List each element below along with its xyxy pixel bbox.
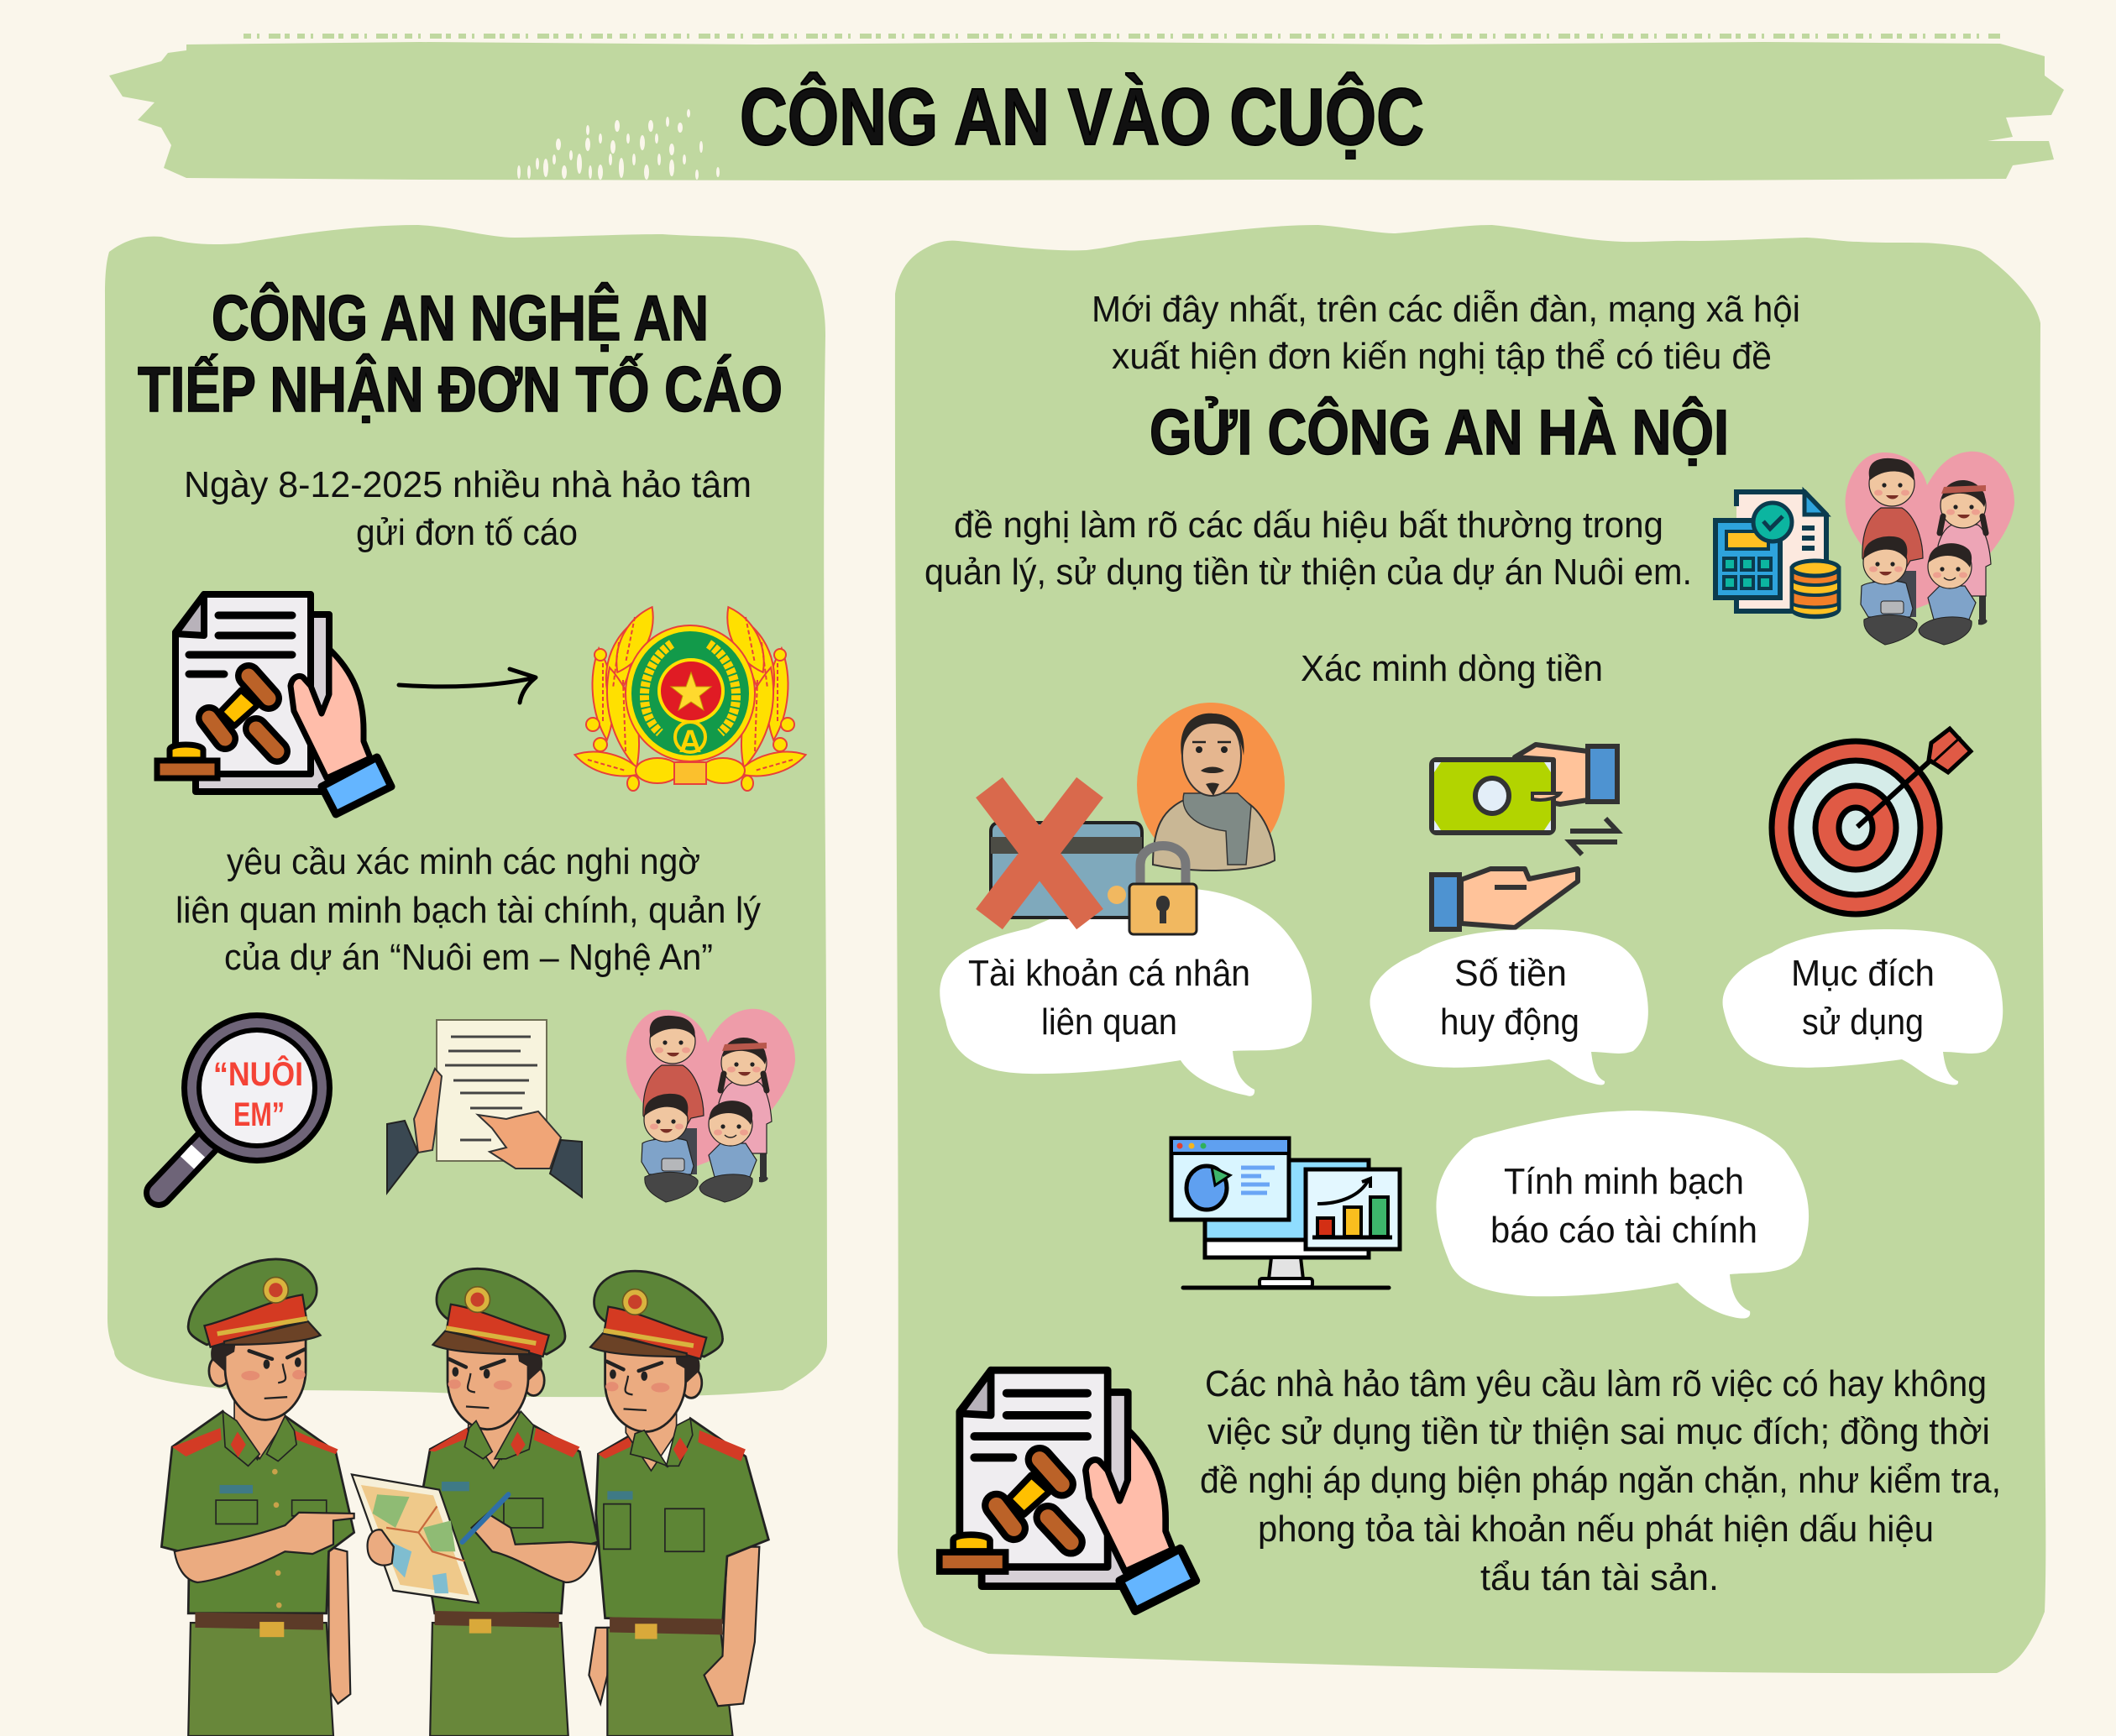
- icon: magnifier with Nuôi em: EM”: [233, 1096, 285, 1133]
- icon: document with gavel (right): [940, 1370, 1196, 1611]
- title: CÔNG AN VÀO CUỘC: [740, 71, 1424, 162]
- text: closing paragraph: Các nhà hảo tâm yêu cầu làm rõ việc có hay không: [1205, 1363, 1987, 1404]
- officer left: [161, 1259, 354, 1736]
- icon: magnifier with Nuôi em: [159, 1012, 333, 1193]
- text: closing paragraph: phong tỏa tài khoản nếu phát hiện dấu hiệu: [1258, 1509, 1934, 1550]
- icon: money handover: [1432, 745, 1617, 929]
- icon: police emblem: A: [678, 724, 702, 760]
- heading: right panel: GỬI CÔNG AN HÀ NỘI: [1150, 397, 1729, 468]
- text: closing paragraph: việc sử dụng tiền từ thiện sai mục đích; đồng thời: [1207, 1411, 1990, 1452]
- icon: police emblem: [572, 601, 809, 791]
- illustration: three police officers: [161, 1259, 768, 1736]
- callout: amount raised: Số tiền: [1454, 953, 1567, 994]
- text: verification request: của dự án “Nuôi em – Nghệ An”: [224, 937, 713, 978]
- officer right: [589, 1271, 768, 1736]
- callout: purpose of use: sử dụng: [1802, 1001, 1924, 1043]
- callout: purpose of use: [1723, 929, 2003, 1085]
- callout: purpose of use: Mục đích: [1791, 953, 1935, 994]
- panel: left background: [105, 225, 827, 1397]
- callout: personal account: Tài khoản cá nhân: [968, 953, 1250, 994]
- callout: financial transparency: báo cáo tài chính: [1490, 1210, 1757, 1251]
- icon: magnifier with Nuôi em: “NUÔI: [213, 1054, 303, 1093]
- text: verification request: yêu cầu xác minh các nghi ngờ: [227, 841, 700, 882]
- callout: amount raised: [1370, 929, 1648, 1085]
- callout: personal account: liên quan: [1041, 1001, 1177, 1043]
- icon: hands pointing at document: [387, 1020, 582, 1197]
- text: intro right: [1092, 289, 1800, 377]
- text: verify cash flow: Xác minh dòng tiền: [1301, 648, 1603, 689]
- heading: left panel: [138, 282, 783, 426]
- icon: credit card, cross and lock: [989, 787, 1197, 934]
- callout: financial transparency: Tính minh bạch: [1504, 1161, 1744, 1202]
- text: closing paragraph: tẩu tán tài sản.: [1480, 1557, 1719, 1598]
- heading: left panel: CÔNG AN NGHỆ AN: [212, 282, 709, 354]
- icon: calculator, document and coins: [1715, 492, 1839, 617]
- text: date of complaint: gửi đơn tố cáo: [356, 512, 578, 553]
- callout: personal account: [940, 888, 1312, 1096]
- text: intro right: Mới đây nhất, trên các diễn đàn, mạng xã hội: [1092, 289, 1800, 330]
- icon: children with heart (right): [1846, 452, 2014, 645]
- text: verification request: [175, 841, 761, 978]
- icon: portrait of person: [1137, 703, 1285, 871]
- icon: document with gavel: [157, 594, 391, 814]
- map: [352, 1474, 479, 1603]
- arrow: [399, 669, 536, 703]
- callout: financial transparency: [1436, 1111, 1809, 1318]
- heading: left panel: TIẾP NHẬN ĐƠN TỐ CÁO: [138, 353, 783, 426]
- text: verification request: liên quan minh bạch tài chính, quản lý: [175, 890, 761, 931]
- text: request clarify: [924, 505, 1692, 593]
- icon: target with arrow: [1772, 729, 1971, 914]
- text: request clarify: quản lý, sử dụng tiền từ thiện của dự án Nuôi em.: [924, 552, 1692, 593]
- text: closing paragraph: [1200, 1363, 2001, 1598]
- officer middle: [418, 1268, 598, 1736]
- text: date of complaint: Ngày 8-12-2025 nhiều nhà hảo tâm: [184, 464, 752, 505]
- text: closing paragraph: đề nghị áp dụng biện pháp ngăn chặn, như kiểm tra,: [1200, 1460, 2001, 1501]
- title banner: brush stroke: [109, 36, 2064, 180]
- icon: children with heart: [626, 1009, 795, 1202]
- officer middle arm with pen: [463, 1494, 597, 1582]
- callout: amount raised: huy động: [1440, 1001, 1579, 1043]
- text: intro right: xuất hiện đơn kiến nghị tập thể có tiêu đề: [1112, 336, 1772, 377]
- text: request clarify: đề nghị làm rõ các dấu hiệu bất thường trong: [954, 505, 1663, 546]
- icon: dashboard monitor: [1171, 1138, 1400, 1288]
- text: date of complaint: [184, 464, 752, 553]
- panel: right background: [895, 225, 2045, 1673]
